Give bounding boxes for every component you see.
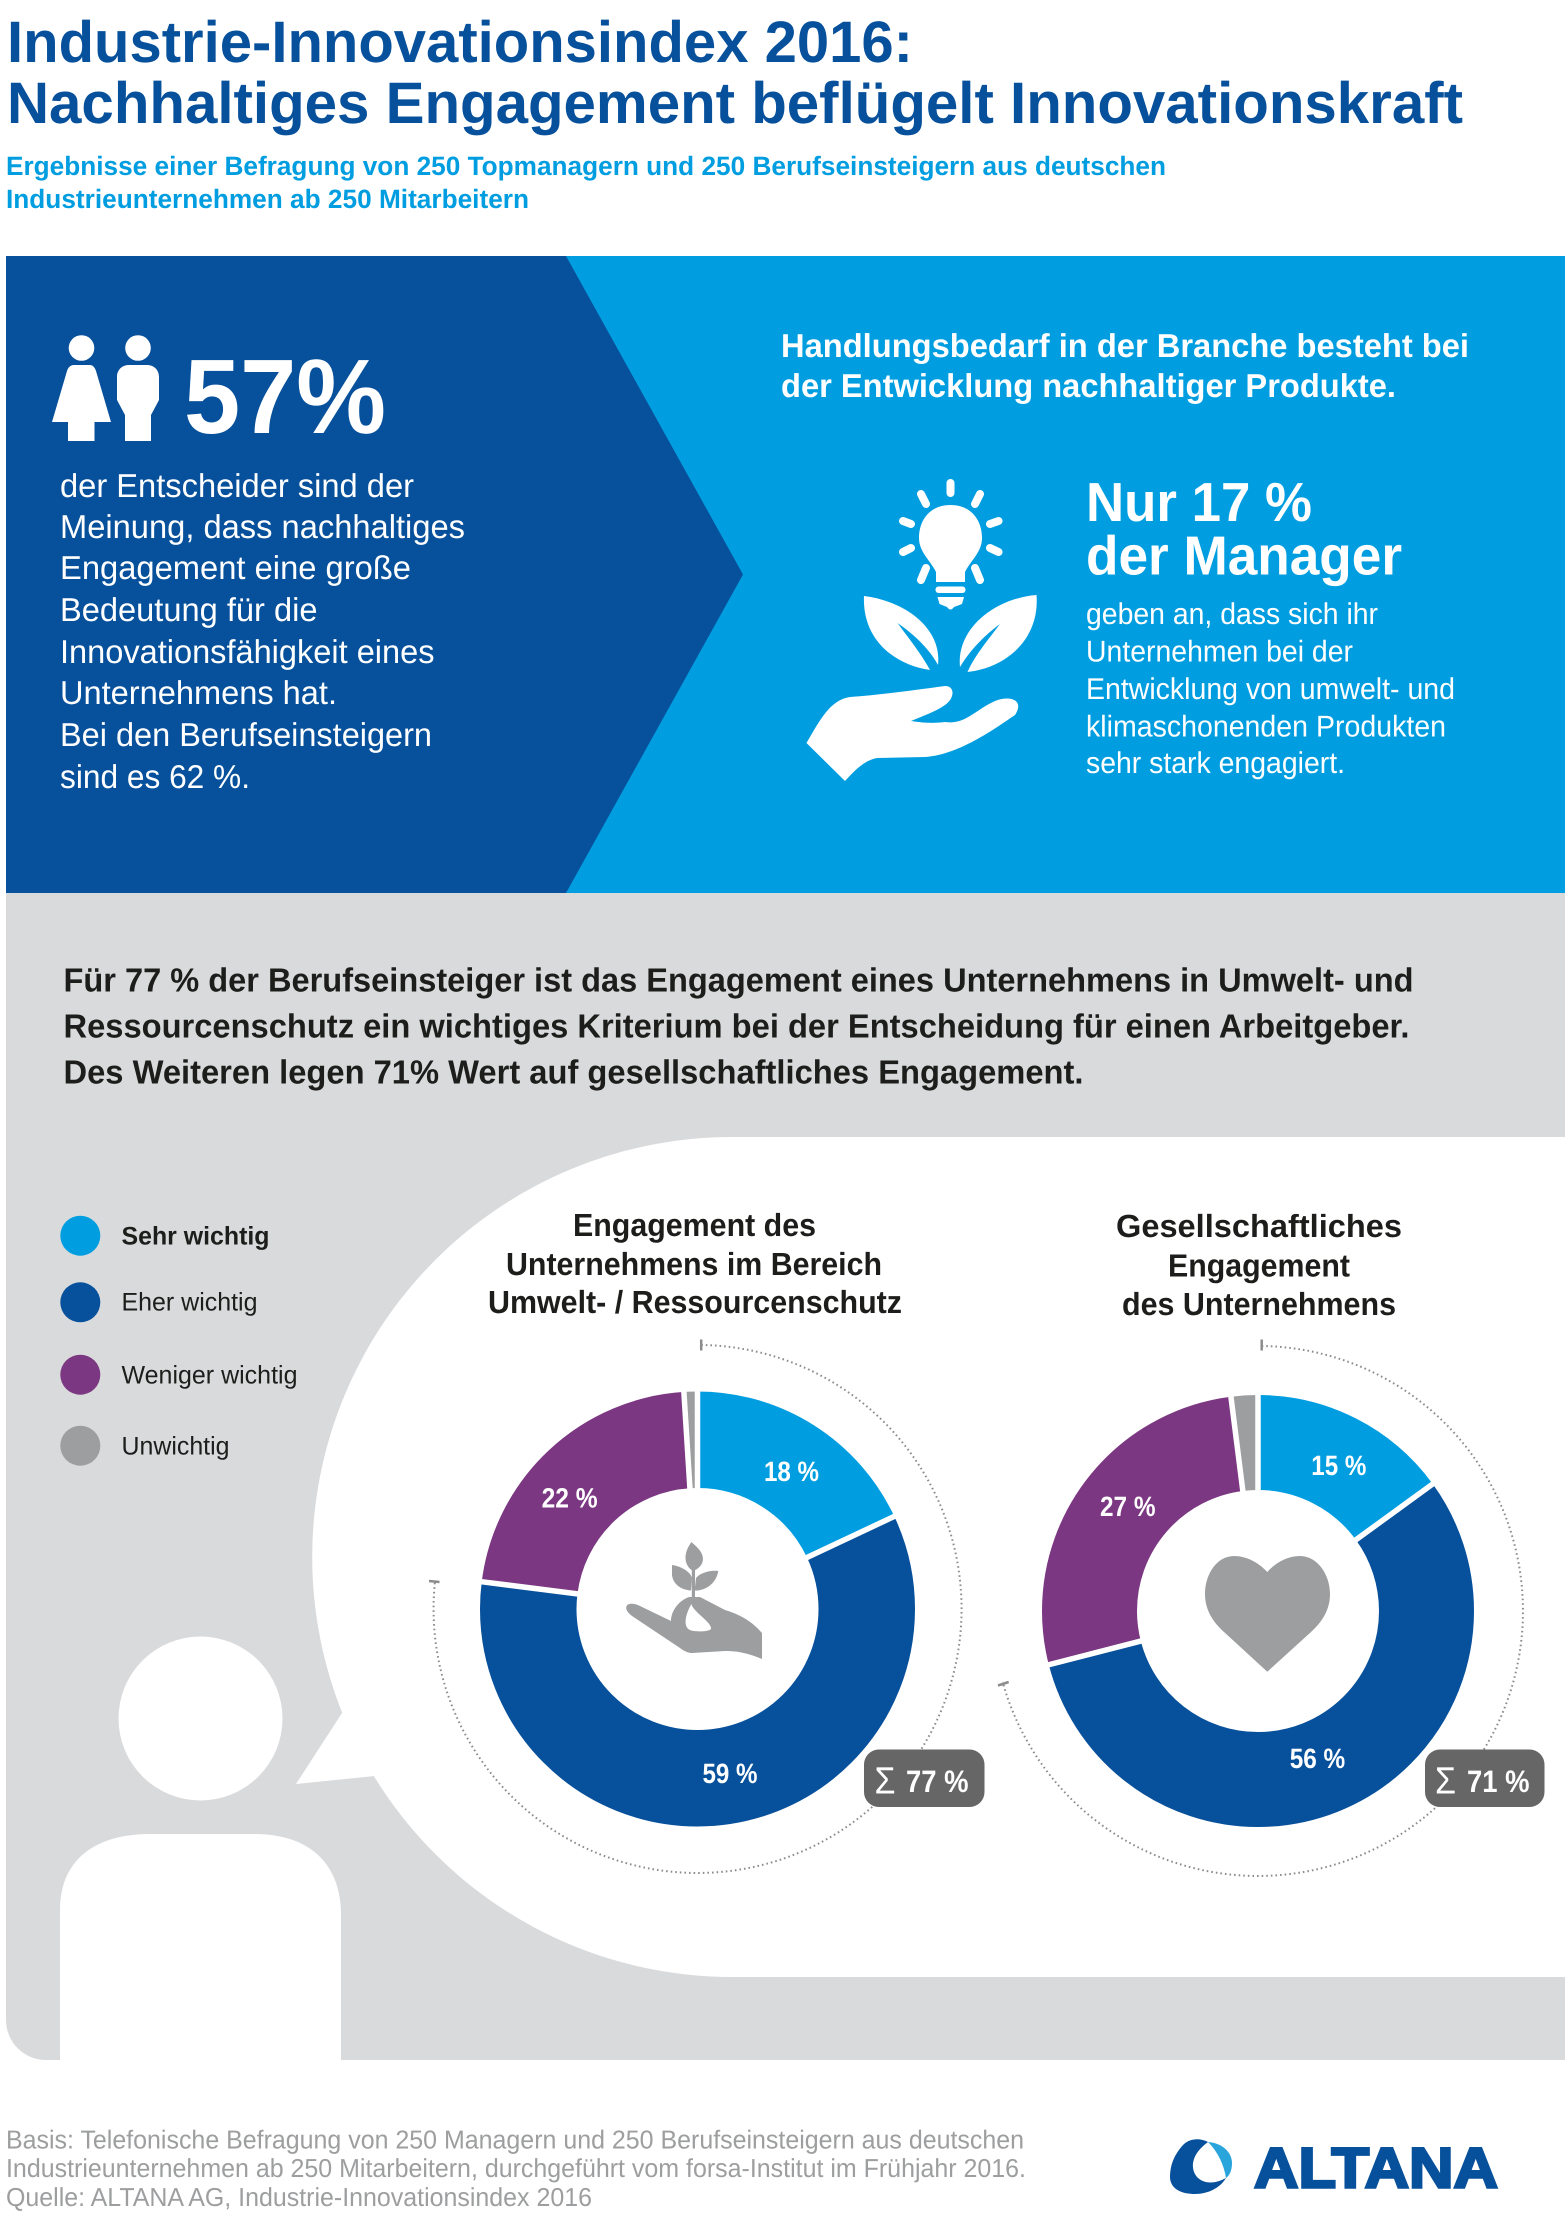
text block: key finding: Ressourcenschutz ein wichtiges Kriterium bei der Entscheidung für einen Arbeitgeber. [64,1008,1410,1046]
icon: woman and man [52,335,159,441]
stat: only 17 percent of managers: Nur 17 % [1086,471,1312,533]
legend [60,1216,298,1466]
logo: ALTANA: ALTANA [1254,2136,1498,2200]
subtitle: Ergebnisse einer Befragung von 250 Topmanagern und 250 Berufseinsteigern aus deutschen [6,151,1166,181]
sum badge: 77 % [906,1764,968,1799]
chart title: social: des Unternehmens [1122,1286,1396,1322]
text block: decision makers: sind es 62 %. [60,758,250,795]
logo: ALTANA [1170,2136,1498,2200]
panel: grey background [6,893,1565,2060]
text block: managers: klimaschonenden Produkten [1086,710,1446,744]
footnote: Industrieunternehmen ab 250 Mitarbeitern, durchgeführt vom forsa-Institut im Frühjahr 2016. [6,2153,1026,2183]
text block: decision makers: Innovationsfähigkeit eines [60,633,434,670]
chart title: environment: Unternehmens im Bereich [506,1246,882,1282]
donut chart: environment [429,1340,984,1873]
sum arc [998,1340,1523,1876]
heading: need for action: Handlungsbedarf in der Branche besteht bei [781,327,1469,364]
chart title: social [1116,1208,1402,1322]
title: Industrie-Innovationsindex 2016: [7,10,913,75]
chart title: environment: Umwelt- / Ressourcenschutz [488,1284,902,1320]
value labels [542,1456,819,1789]
sum arc [429,1340,962,1873]
text block: managers: Unternehmen bei der [1086,636,1353,668]
legend: Eher wichtig [122,1289,258,1317]
footnote: Quelle: ALTANA AG, Industrie-Innovationsindex 2016 [6,2182,592,2212]
footnote [6,2124,1026,2212]
sum badge: 71 % [1467,1764,1530,1799]
text block: managers: sehr stark engagiert. [1086,747,1345,780]
chart title: social: Gesellschaftliches [1116,1208,1402,1244]
legend: Unwichtig [122,1432,230,1460]
value labels: 27 % [1100,1491,1156,1522]
chart title: environment [488,1207,902,1320]
icon: heart [1205,1556,1330,1672]
icon: light bulb, leaves and hand [806,483,1037,781]
sum badge [1425,1750,1544,1807]
icon: person silhouette [60,1636,341,2060]
value labels [1100,1450,1366,1774]
icon: hand with plant [626,1542,762,1659]
subtitle [6,151,1166,214]
stat: 57%: 57% [184,338,386,456]
text block: managers: geben an, dass sich ihr [1086,598,1378,631]
panel: light blue background [6,256,1565,893]
donut chart: social [998,1340,1544,1876]
text block: managers: Entwicklung von umwelt- und [1086,673,1455,706]
sum badge: Σ [1435,1760,1456,1802]
text block: managers [1086,598,1455,780]
sum badge: Σ [874,1760,896,1802]
stat: only 17 percent of managers [1086,471,1402,586]
value labels: 56 % [1290,1743,1345,1774]
value labels: 22 % [542,1482,598,1514]
text block: decision makers: Unternehmens hat. [60,674,337,711]
value labels: 18 % [764,1456,819,1487]
text block: decision makers: der Entscheider sind der [60,467,414,504]
legend: Sehr wichtig [122,1222,270,1250]
chart title: environment: Engagement des [573,1207,816,1243]
text block: key finding: Für 77 % der Berufseinsteiger ist das Engagement eines Unternehmens in Umwelt- und [64,962,1414,1000]
value labels: 15 % [1311,1450,1366,1481]
title: Nachhaltiges Engagement beflügelt Innovationskraft [7,71,1463,136]
subtitle: Industrieunternehmen ab 250 Mitarbeitern [6,184,529,214]
speech bubble [296,1137,1565,1977]
panel: dark blue chevron [6,256,743,893]
sum badge [864,1750,984,1807]
value labels: 59 % [702,1758,758,1789]
text block: key finding [64,962,1414,1092]
text block: decision makers: Meinung, dass nachhaltiges [60,508,465,545]
heading: need for action [781,327,1469,404]
legend: Weniger wichtig [122,1362,298,1390]
heading: need for action: der Entwicklung nachhaltiger Produkte. [781,367,1396,404]
text block: decision makers [60,467,465,795]
footnote: Basis: Telefonische Befragung von 250 Managern und 250 Berufseinsteigern aus deutschen [6,2124,1024,2154]
text block: decision makers: Engagement eine große [60,549,411,586]
chart title: social: Engagement [1168,1248,1350,1284]
title [7,10,1463,136]
text block: key finding: Des Weiteren legen 71% Wert auf gesellschaftliches Engagement. [64,1054,1084,1092]
text block: decision makers: Bedeutung für die [60,591,318,628]
stat: only 17 percent of managers: der Manager [1086,524,1402,586]
text block: decision makers: Bei den Berufseinsteigern [60,716,432,753]
